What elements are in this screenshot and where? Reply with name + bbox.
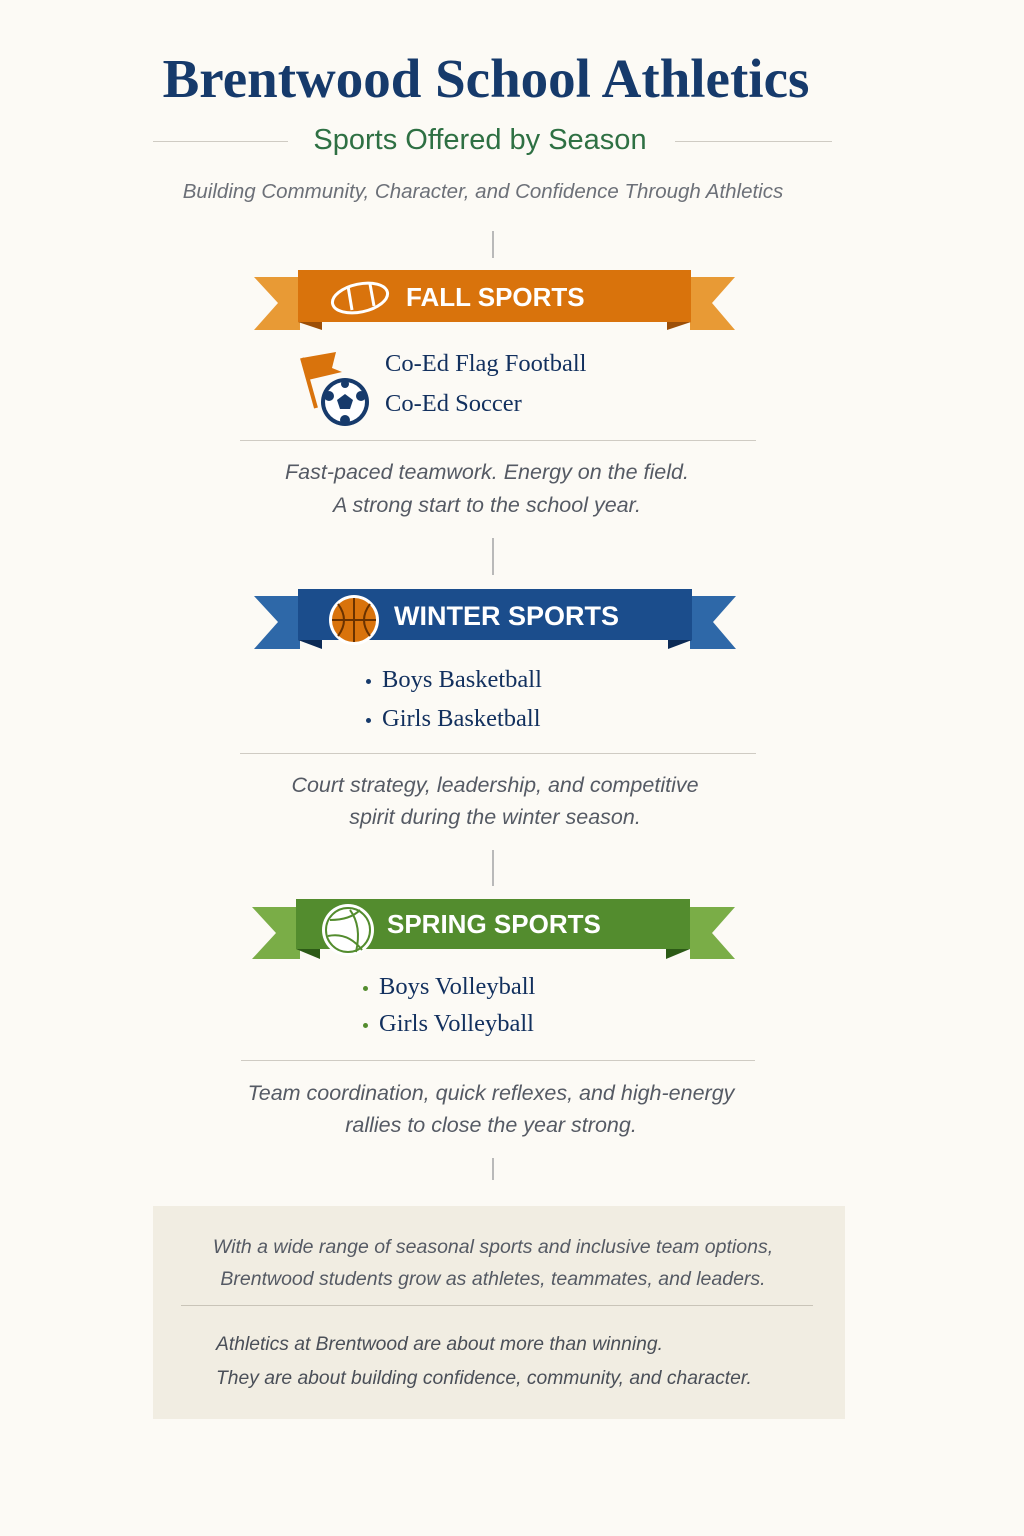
icon: volleyball: [322, 904, 374, 956]
closing text 2: [215, 1334, 752, 1389]
banner: winter: [254, 589, 736, 649]
fall description: A strong start to the school year.: [333, 493, 641, 517]
winter sports list: Boys Basketball: [382, 666, 542, 693]
closing text 1: With a wide range of seasonal sports and inclusive team options,: [213, 1236, 773, 1258]
connector: [492, 1158, 494, 1180]
closing panel: [153, 1206, 845, 1419]
spring description: rallies to close the year strong.: [345, 1113, 637, 1137]
fall description: [285, 460, 689, 517]
fall sports list: Co-Ed Soccer: [385, 390, 522, 417]
fall description: Fast-paced teamwork. Energy on the field.: [285, 460, 689, 484]
closing text 2: They are about building confidence, community, and character.: [216, 1368, 752, 1389]
connector: [492, 850, 494, 886]
icon: football: [330, 278, 390, 318]
connector: [492, 538, 494, 575]
banner: fall: FALL SPORTS: [406, 282, 585, 312]
closing text 2: Athletics at Brentwood are about more than winning.: [216, 1334, 663, 1355]
banner: winter: WINTER SPORTS: [394, 601, 619, 631]
connector: [492, 231, 494, 258]
subtitle: Sports Offered by Season: [313, 124, 647, 156]
winter description: [291, 773, 699, 829]
winter sports list: [366, 666, 542, 732]
fall sports list: [385, 350, 586, 417]
icon: flag and soccer ball: [300, 352, 369, 426]
spring sports list: [363, 973, 535, 1037]
winter sports list: Girls Basketball: [382, 705, 541, 732]
spring description: Team coordination, quick reflexes, and high-energy: [248, 1081, 734, 1105]
icon: basketball: [329, 595, 379, 645]
tagline: Building Community, Character, and Confidence Through Athletics: [183, 180, 783, 203]
title: Brentwood School Athletics: [163, 48, 809, 109]
spring sports list: Boys Volleyball: [379, 973, 535, 1000]
closing text 1: Brentwood students grow as athletes, teammates, and leaders.: [220, 1268, 766, 1290]
fall sports list: Co-Ed Flag Football: [385, 350, 586, 377]
spring sports list: Girls Volleyball: [379, 1010, 534, 1037]
banner: spring: SPRING SPORTS: [387, 909, 601, 939]
closing text 1: [213, 1236, 773, 1290]
spring description: [248, 1081, 736, 1137]
winter description: spirit during the winter season.: [349, 805, 641, 829]
winter description: Court strategy, leadership, and competitive: [291, 773, 699, 797]
banner: spring: [252, 899, 735, 959]
banner: fall: [254, 270, 735, 330]
